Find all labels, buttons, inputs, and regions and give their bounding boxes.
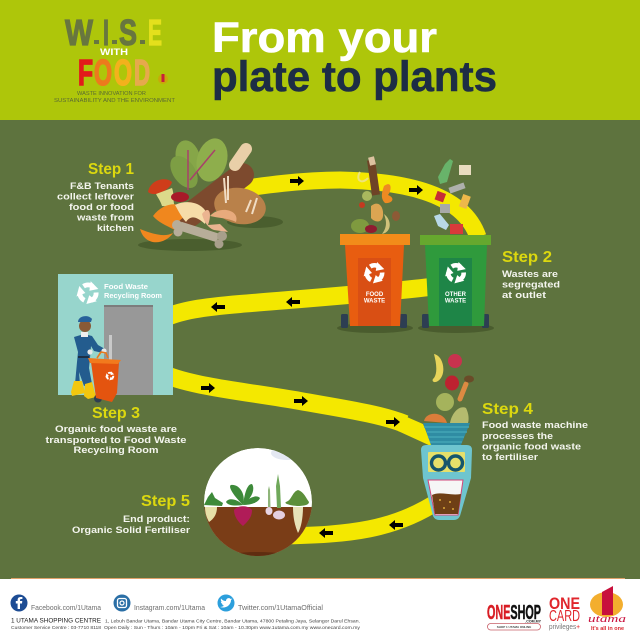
other waste bin xyxy=(418,235,494,333)
step 2 text: segregated xyxy=(502,280,560,290)
step 2 text: Wastes are xyxy=(502,269,558,280)
1 utama logo xyxy=(588,586,627,632)
instagram link xyxy=(114,594,206,612)
oneshop logo xyxy=(487,602,542,630)
green background panel xyxy=(0,120,640,579)
turnip xyxy=(204,492,223,522)
one card logo: privileges+ xyxy=(549,622,581,631)
twitter link xyxy=(218,594,323,612)
step 5 text: Organic Solid Fertiliser xyxy=(72,525,190,536)
twitter link: Twitter.com/1UtamaOfficial xyxy=(238,603,323,612)
step 2 text xyxy=(502,249,560,301)
logo: WISE with Food xyxy=(54,12,175,104)
1 utama logo: utama xyxy=(588,613,627,625)
step 3 text xyxy=(46,405,186,456)
recycling room panel: Recycling Room xyxy=(104,293,162,300)
food waste bin xyxy=(337,234,413,333)
step 2 text: at outlet xyxy=(502,290,547,301)
one card logo: CARD xyxy=(549,608,580,625)
step 1 text: Step 1 xyxy=(88,161,134,178)
oneshop logo: SHOP 1 UTAMA ONLINE xyxy=(497,625,531,629)
step 4 text: processes the xyxy=(482,431,553,442)
logo: WISE with Food: WITH xyxy=(100,47,128,58)
falling food waste xyxy=(351,157,400,234)
logo: WISE with Food: O xyxy=(114,52,132,93)
logo: WISE with Food: S xyxy=(119,12,137,53)
logo: WISE with Food: F xyxy=(78,52,93,93)
title: plate to plants xyxy=(212,53,497,101)
step 4 text xyxy=(482,401,588,463)
step 3 text: Recycling Room xyxy=(74,445,158,456)
step 3 text: Organic food waste are xyxy=(55,424,177,435)
step 4 text: organic food waste xyxy=(482,442,581,452)
tall garlic sprout xyxy=(273,474,285,520)
worker figure xyxy=(71,316,107,399)
wheeled orange bin xyxy=(88,352,121,402)
footer xyxy=(0,578,640,640)
step 3 text: Step 3 xyxy=(92,405,140,422)
other waste bin: WASTE xyxy=(445,298,466,304)
facebook link xyxy=(10,594,102,612)
step 5 text: End product: xyxy=(123,514,190,525)
step 1 text: F&B Tenants xyxy=(70,181,134,192)
logo: WISE with Food: E xyxy=(148,12,162,53)
logo: WISE with Food: I xyxy=(103,12,109,53)
logo: WISE with Food: SUSTAINABILITY AND THE ENVIRONMENT xyxy=(54,98,175,104)
address text: Open Daily : Sun - Thurs : 10am - 10pm Fri & Sat : 10am - 10.30pm www.1utama.com.my www.onecard.com.my xyxy=(104,625,361,630)
step 4 text: Food waste machine xyxy=(482,420,588,431)
food waste machine xyxy=(421,423,472,520)
step 5 text xyxy=(72,493,190,536)
header band xyxy=(0,0,640,120)
soil circle: organic fertiliser xyxy=(204,446,312,564)
address text xyxy=(11,618,361,630)
step 1 text xyxy=(57,161,134,234)
address text: 1 UTAMA SHOPPING CENTRE xyxy=(11,618,102,624)
facebook link: Facebook.com/1Utama xyxy=(31,603,102,612)
beetroot xyxy=(226,484,260,526)
step 1 text: food or food xyxy=(69,202,134,213)
title xyxy=(212,14,497,101)
oneshop logo: ONESHOP xyxy=(487,602,541,624)
one card logo xyxy=(549,595,581,631)
daikon radish xyxy=(285,490,309,533)
other waste bin: OTHER xyxy=(445,292,467,298)
step 1 text: waste from xyxy=(76,212,134,224)
yellow road xyxy=(160,180,478,536)
food waste bin: FOOD xyxy=(366,292,384,298)
address text: 1, Lebuh Bandar Utama, Bandar Utama City Centre, Bandar Utama, 47800 Petaling Jaya, Selangor Darul Ehsan. xyxy=(105,618,360,624)
one card logo: ONE xyxy=(549,595,580,613)
falling other waste xyxy=(434,159,471,234)
oneshop logo: .COM.MY xyxy=(525,620,542,624)
step 5 text: Step 5 xyxy=(141,493,190,510)
recycling room panel: Food Waste xyxy=(104,284,148,291)
logo: WISE with Food: O xyxy=(94,52,112,93)
instagram link: Instagram.com/1Utama xyxy=(134,603,206,612)
falling food into machine xyxy=(424,354,474,423)
1 utama logo: It's all in one xyxy=(591,626,624,632)
small garlic sprout xyxy=(266,486,272,515)
logo: WISE with Food: D xyxy=(134,52,150,93)
recycling room panel xyxy=(58,274,173,402)
illustration: food scraps xyxy=(138,135,283,251)
title: From your xyxy=(212,14,437,62)
road arrows xyxy=(201,176,423,538)
step 2 text: Step 2 xyxy=(502,249,552,266)
step 4 text: to fertiliser xyxy=(482,452,538,463)
step 1 text: kitchen xyxy=(97,223,134,234)
step 4 text: Step 4 xyxy=(482,401,533,418)
address text: Customer Service Centre : 03-7710 8118 xyxy=(11,625,101,630)
logo: WISE with Food: W xyxy=(65,12,93,53)
step 1 text: collect leftover xyxy=(57,192,134,202)
food waste bin: WASTE xyxy=(364,298,385,304)
logo: WISE with Food: WASTE INNOVATION FOR xyxy=(77,91,146,97)
step 3 text: transported to Food Waste xyxy=(46,435,186,446)
